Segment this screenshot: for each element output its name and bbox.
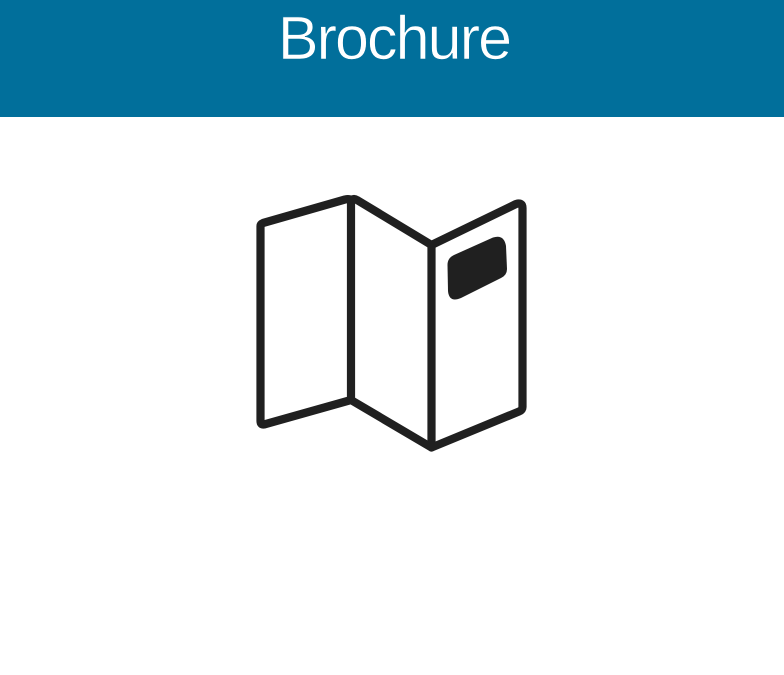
title: Brochure	[278, 4, 510, 72]
header band	[0, 0, 784, 117]
